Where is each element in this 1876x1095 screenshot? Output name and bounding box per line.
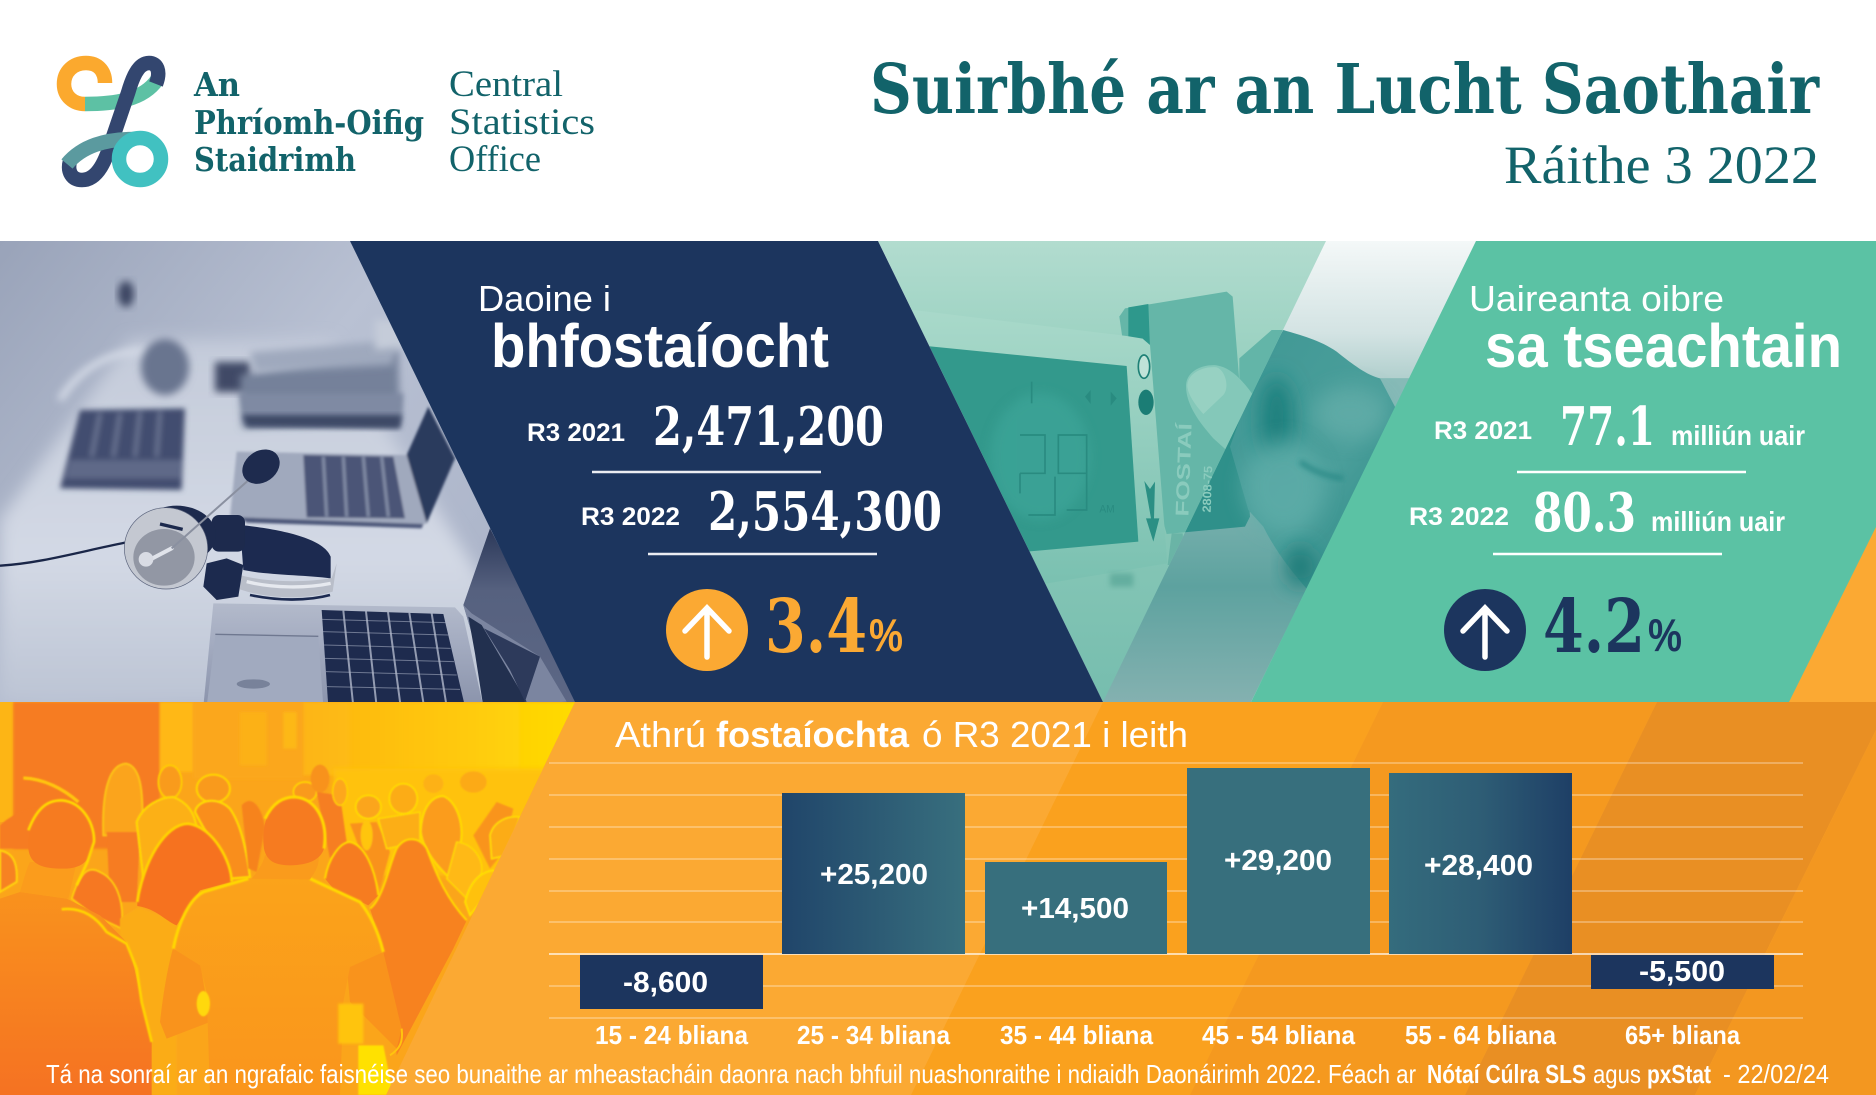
logo text: Irish name: Staidrimh xyxy=(194,140,356,179)
heading: Daoine i bhfostaíocht: bhfostaíocht xyxy=(491,312,829,380)
finger behind the card xyxy=(1239,330,1283,394)
stat: R3 2022 employment xyxy=(581,481,942,543)
icon: orange up arrow xyxy=(666,589,748,671)
axis labels: age groups: 65+ bliana xyxy=(1625,1020,1740,1050)
photo: office desk with headset xyxy=(0,241,600,707)
bar: 55-64 +28,400: +28,400 xyxy=(1424,850,1533,882)
headset with microphone xyxy=(0,442,337,600)
heading: Uaireanta oibre sa tseachtain: Uaireanta oibre xyxy=(1469,278,1724,319)
stat: R3 2021 hours: 77.1 xyxy=(1560,396,1655,458)
chart heading xyxy=(615,714,1188,755)
chart heading: fostaíochta xyxy=(716,714,910,755)
stat: R3 2021 employment: 2,471,200 xyxy=(653,396,884,458)
logo: Central Statistics Office xyxy=(64,63,595,180)
icon: knot logo mark xyxy=(64,63,161,180)
card label: FOSTAÍ xyxy=(1171,422,1196,517)
stat: employment change 3.4%: 3.4 xyxy=(765,584,867,670)
photo detail drawn in crop coordinates xyxy=(0,393,580,707)
bar: 35-44 +14,500: +14,500 xyxy=(1021,893,1129,925)
time card xyxy=(1119,292,1250,534)
chart heading: Athrú xyxy=(615,714,706,755)
stat: hours change 4.2%: % xyxy=(1648,609,1682,661)
bar: 25-34 +25,200 xyxy=(782,793,965,954)
background crowd xyxy=(0,764,520,915)
footer note: Tá na sonraí ar an ngrafaic faisnéise seo bunaithe ar mheastacháin daonra nach bhfuil nuashonraithe i ndiaidh Daonáirimh 2022. Féach ar xyxy=(46,1059,1416,1089)
footer note: Nótaí Cúlra SLS xyxy=(1427,1059,1586,1089)
stat: R3 2021 employment: R3 2021 xyxy=(527,419,625,447)
decoration: orange corner xyxy=(1789,527,1876,702)
bright highlights near hands xyxy=(197,991,210,1016)
heading: Uaireanta oibre sa tseachtain xyxy=(1469,278,1842,380)
heading: Daoine i bhfostaíocht xyxy=(478,278,829,380)
stat: R3 2022 employment: R3 2022 xyxy=(581,503,680,531)
logo text: English name xyxy=(449,64,595,180)
lighter shirt behind centre xyxy=(120,916,124,930)
bar: 15-24 -8,600: -8,600 xyxy=(623,967,708,999)
woman with long hair right xyxy=(370,839,467,1055)
heading: Uaireanta oibre sa tseachtain: sa tseachtain xyxy=(1485,312,1842,380)
chart heading: ó R3 2021 i leith xyxy=(922,714,1188,755)
rear laptop xyxy=(230,407,455,528)
front laptop xyxy=(203,603,483,707)
logo text: English name: Office xyxy=(449,139,541,180)
left-hand teal duotone layer xyxy=(878,241,1328,702)
axis labels: age groups: 55 - 64 bliana xyxy=(1405,1020,1556,1050)
photo: crowd of people walking xyxy=(0,702,600,1095)
footer note: agus xyxy=(1593,1059,1641,1089)
stat: R3 2021 hours xyxy=(1434,396,1805,458)
subtitle: Ráithe 3 2022 xyxy=(1504,135,1819,195)
icon: navy up arrow xyxy=(1444,589,1526,671)
time clock device xyxy=(916,320,1183,588)
stat: R3 2021 hours: milliún uair xyxy=(1671,420,1805,451)
long-haired woman centre-left xyxy=(137,824,232,925)
right-hand duotone layer: card and hand xyxy=(1185,330,1409,596)
stat: R3 2022 hours: R3 2022 xyxy=(1409,503,1509,531)
bar: 35-44 +14,500 xyxy=(985,862,1167,954)
thumb xyxy=(1186,365,1252,449)
stat: R3 2021 hours: R3 2021 xyxy=(1434,417,1532,445)
footer note: - 22/02/24 xyxy=(1723,1059,1829,1089)
stat: R3 2021 employment xyxy=(527,396,884,458)
stat: hours change 4.2%: 4.2 xyxy=(1543,584,1645,670)
logo text: Irish name: Phríomh-Oifig xyxy=(194,103,424,142)
blurred keypad xyxy=(60,408,185,490)
bar: 15-24 -8,600 xyxy=(580,955,763,1009)
time clock device: AM xyxy=(1099,504,1115,516)
stat: employment change 3.4%: % xyxy=(869,609,903,661)
heading: Daoine i bhfostaíocht: Daoine i xyxy=(478,278,611,319)
axis labels: age groups: 25 - 34 bliana xyxy=(797,1020,950,1050)
logo text: English name: Central xyxy=(449,64,563,105)
bar chart: employment change by age group xyxy=(549,763,1803,1050)
photo: card being swiped in time clock xyxy=(878,241,1478,702)
panel: hours worked per week xyxy=(1251,241,1876,702)
logo text: English name: Statistics xyxy=(449,102,595,143)
logo text: Irish name xyxy=(193,65,424,179)
stat: R3 2022 hours xyxy=(1409,482,1785,544)
axis labels: age groups: 35 - 44 bliana xyxy=(1000,1020,1153,1050)
card label: 2808-75 xyxy=(1200,465,1215,513)
left man in dark jacket xyxy=(0,800,152,1095)
stat: R3 2022 employment: 2,554,300 xyxy=(708,481,942,543)
person behind left figure xyxy=(72,870,122,929)
stat: R3 2022 hours: milliún uair xyxy=(1651,506,1785,537)
bar: 45-54 +29,200: +29,200 xyxy=(1224,845,1332,877)
bar: 25-34 +25,200: +25,200 xyxy=(820,859,928,891)
centre man in t-shirt xyxy=(160,797,402,1095)
panel: employment change background xyxy=(0,702,1876,1095)
open laptop screen edge xyxy=(463,528,580,707)
axis labels: age groups: 45 - 54 bliana xyxy=(1202,1020,1355,1050)
bar: 65+ -5,500: -5,500 xyxy=(1639,956,1725,988)
axis labels: age groups: 15 - 24 bliana xyxy=(595,1020,748,1050)
logo text: Irish name: An xyxy=(193,65,240,104)
stat: R3 2022 hours: 80.3 xyxy=(1533,482,1636,544)
axis labels: age groups xyxy=(595,1020,1740,1050)
chart gridlines xyxy=(549,763,1803,1018)
blurred phone base xyxy=(240,393,403,428)
bar: 65+ -5,500 xyxy=(1591,955,1774,989)
woman behind centre figure xyxy=(325,842,378,905)
bar: 55-64 +28,400 xyxy=(1389,773,1572,954)
panel: people in employment xyxy=(350,241,1103,702)
footer note: pxStat xyxy=(1647,1059,1711,1089)
bar: 45-54 +29,200 xyxy=(1187,768,1370,954)
card label xyxy=(1175,422,1212,515)
